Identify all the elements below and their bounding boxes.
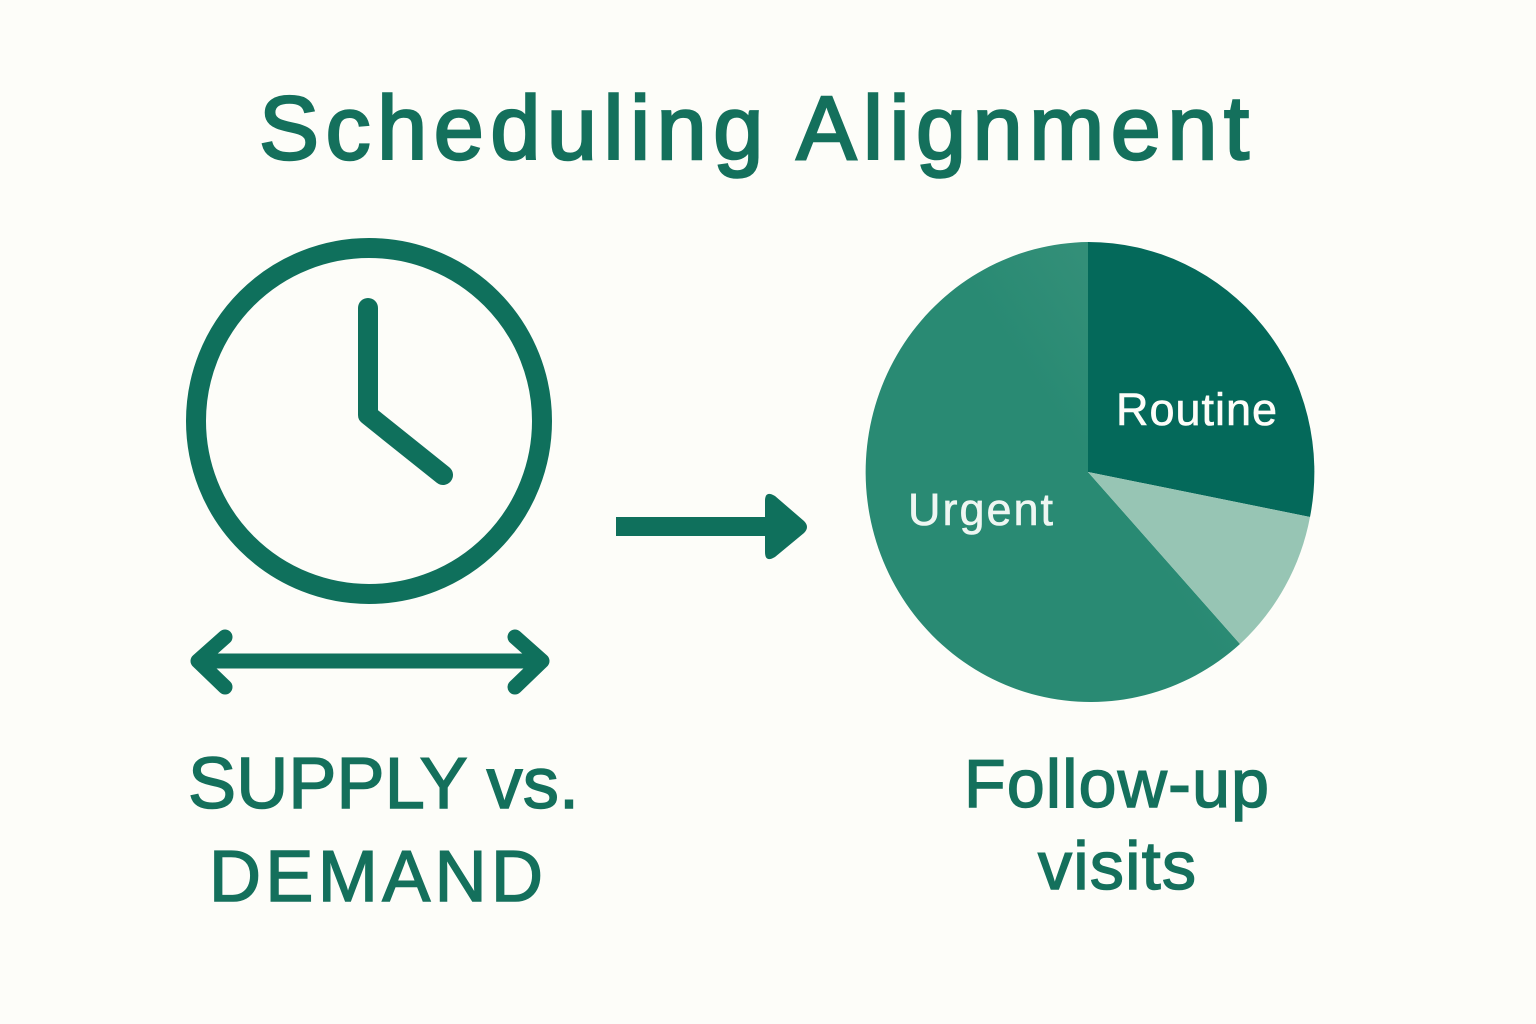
pie chart [866, 242, 1314, 702]
label: routine: Routine [1116, 384, 1277, 435]
icon: clock [196, 248, 542, 594]
label: follow-up visits: visits [1038, 828, 1196, 904]
arrow: to pie chart [616, 494, 807, 559]
segment: urgent [866, 242, 1240, 702]
label: supply vs demand [188, 744, 579, 917]
segment: follow-up [1088, 472, 1310, 644]
label: follow-up visits [964, 746, 1269, 904]
segment: routine [1088, 242, 1314, 517]
label: urgent: Urgent [908, 484, 1053, 535]
icon: double-headed arrow [198, 637, 542, 687]
label: supply vs demand: DEMAND [209, 837, 543, 917]
title: Scheduling Alignment [259, 79, 1249, 179]
label: follow-up visits: Follow-up [964, 746, 1269, 822]
label: supply vs demand: SUPPLY vs. [188, 744, 579, 824]
